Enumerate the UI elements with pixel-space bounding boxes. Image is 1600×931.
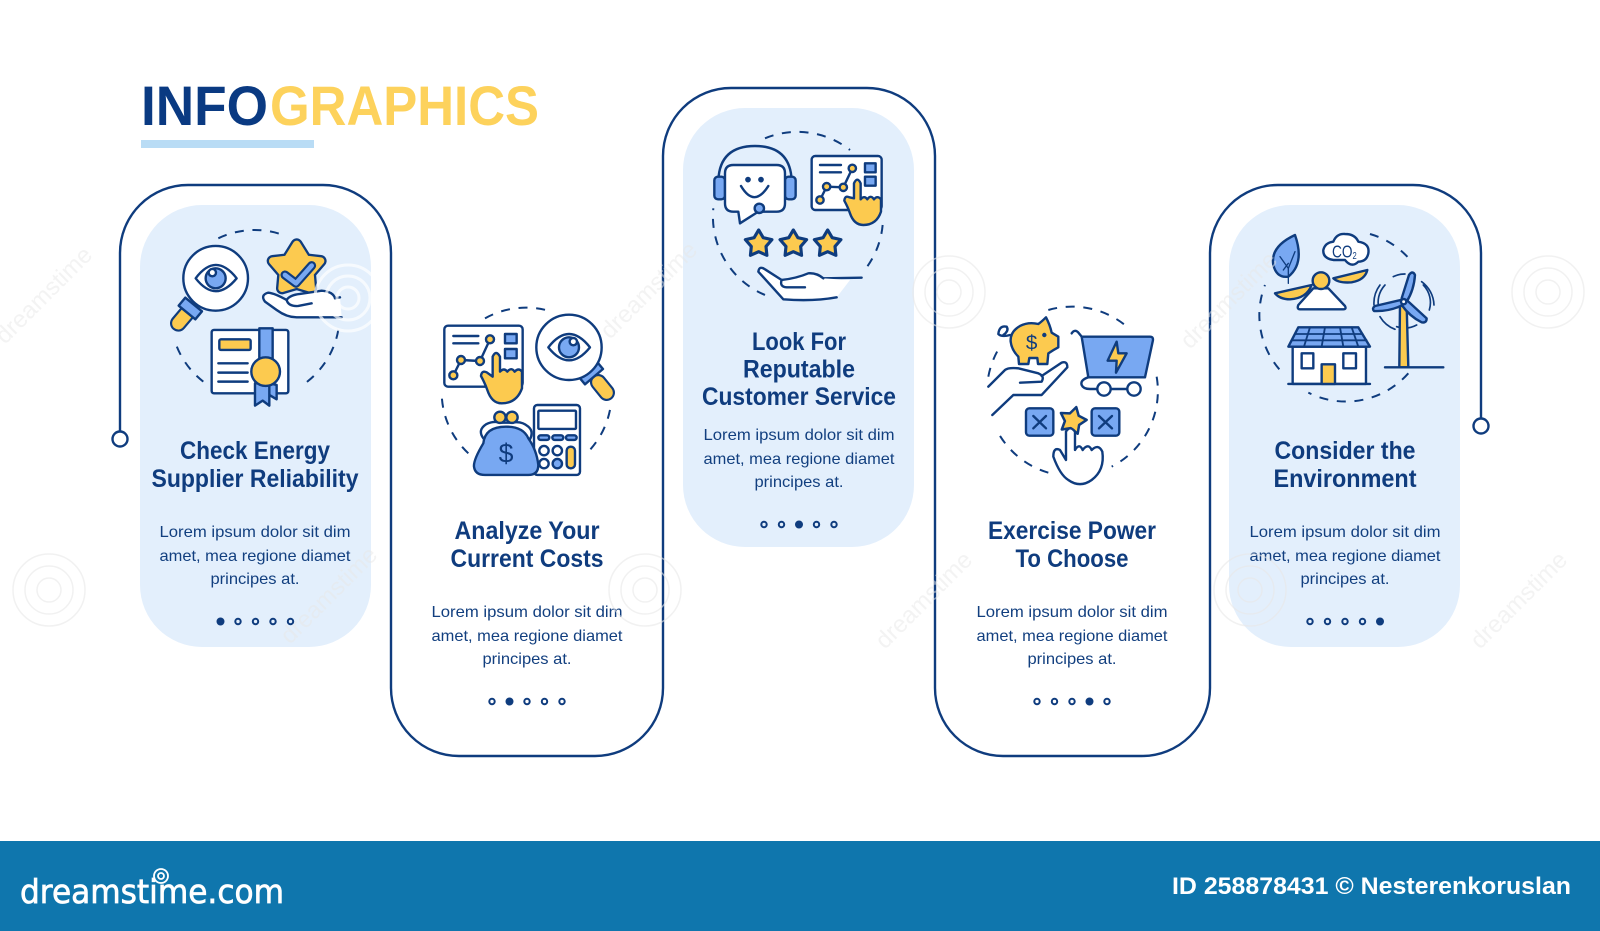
heading: analyze your current costs (450, 517, 604, 573)
heading: check energy supplier reliability (152, 437, 359, 493)
heading: look for reputable customer service (702, 328, 896, 411)
text block: step 4 description (976, 604, 1168, 668)
pagination dots: step 4 (1034, 698, 1110, 704)
title: GRAPHICS (270, 74, 539, 137)
logo: dreamstime.com: dreamstime.com (20, 872, 284, 911)
text block: step 3 description: amet, mea regione diamet (704, 451, 895, 468)
watermarks: dreamstime (595, 236, 703, 344)
icon: card, magnifier, purse and calculator (442, 308, 610, 475)
watermarks: dreamstime (870, 546, 978, 654)
icon: piggy bank, cart, choice boxes and pointing hand: $ (1026, 331, 1038, 354)
panel: look for reputable customer service background (683, 108, 914, 547)
pagination dots: step 5 (1307, 618, 1383, 624)
text block: step 4 description: principes at. (1028, 651, 1116, 668)
watermarks: dreamstime (1465, 546, 1573, 654)
heading: look for reputable customer service: Reputable (743, 356, 855, 384)
icon: card, magnifier, purse and calculator: $ (499, 439, 514, 469)
icon: leaf, co2 scale, solar house and wind turbine (1259, 234, 1443, 402)
heading: exercise power to choose: To Choose (1016, 545, 1129, 573)
text block: step 4 description: Lorem ipsum dolor sit dim (976, 604, 1168, 621)
heading: check energy supplier reliability: Supplier Reliability (152, 465, 359, 493)
icon: leaf, co2 scale, solar house and wind turbine: CO (1332, 243, 1352, 262)
watermarks: dreamstime (1175, 246, 1283, 354)
text block: step 3 description: Lorem ipsum dolor sit dim (704, 427, 894, 444)
heading: consider the environment (1274, 437, 1417, 493)
connected outline frame (112, 88, 1488, 756)
text block: step 1 description: Lorem ipsum dolor sit dim (160, 524, 350, 541)
title underline (141, 140, 314, 148)
watermarks (0, 236, 1584, 654)
pagination dots: step 3 (761, 522, 837, 528)
icon: customer support, card, stars and hand (713, 132, 883, 300)
heading: look for reputable customer service: Customer Service (702, 383, 896, 411)
heading: analyze your current costs: Current Costs (450, 545, 604, 573)
text block: step 3 description: principes at. (754, 474, 844, 491)
title: INFO (141, 74, 268, 137)
text block: step 5 description (1250, 524, 1441, 588)
text block: step 2 description: amet, mea regione diamet (432, 628, 623, 645)
heading: analyze your current costs: Analyze Your (454, 517, 600, 545)
heading: check energy supplier reliability: Check Energy (180, 437, 330, 465)
heading: exercise power to choose (988, 517, 1156, 573)
icon: piggy bank, cart, choice boxes and pointing hand (988, 307, 1158, 484)
heading: consider the environment: Consider the (1274, 437, 1416, 465)
watermarks: dreamstime (275, 541, 383, 649)
image id and author credit: ID 258878431 © Nesterenkoruslan (1172, 873, 1571, 900)
heading: exercise power to choose: Exercise Power (988, 517, 1156, 545)
pagination dots: step 2 (489, 698, 565, 704)
footer bar (0, 841, 1600, 931)
title (141, 74, 539, 137)
panel: check energy supplier reliability background (140, 205, 371, 647)
pagination dots: step 1 (218, 618, 293, 624)
text block: step 2 description: Lorem ipsum dolor sit dim (432, 604, 622, 621)
heading: consider the environment: Environment (1274, 465, 1417, 493)
text block: step 5 description: amet, mea regione diamet (1250, 548, 1441, 565)
icon: magnifier, star and certificate (175, 230, 342, 406)
text block: step 2 description (432, 604, 623, 668)
text block: step 3 description (704, 427, 895, 491)
text block: step 1 description (160, 524, 351, 588)
heading: look for reputable customer service: Look For (752, 328, 846, 356)
text block: step 1 description: amet, mea regione diamet (160, 548, 351, 565)
text block: step 4 description: amet, mea regione diamet (976, 628, 1168, 645)
text block: step 2 description: principes at. (482, 651, 572, 668)
text block: step 5 description: Lorem ipsum dolor sit dim (1250, 524, 1440, 541)
icon: leaf, co2 scale, solar house and wind turbine: 2 (1352, 250, 1357, 261)
text block: step 1 description: principes at. (210, 571, 300, 588)
panel: consider the environment background (1229, 205, 1460, 647)
text block: step 5 description: principes at. (1300, 571, 1390, 588)
